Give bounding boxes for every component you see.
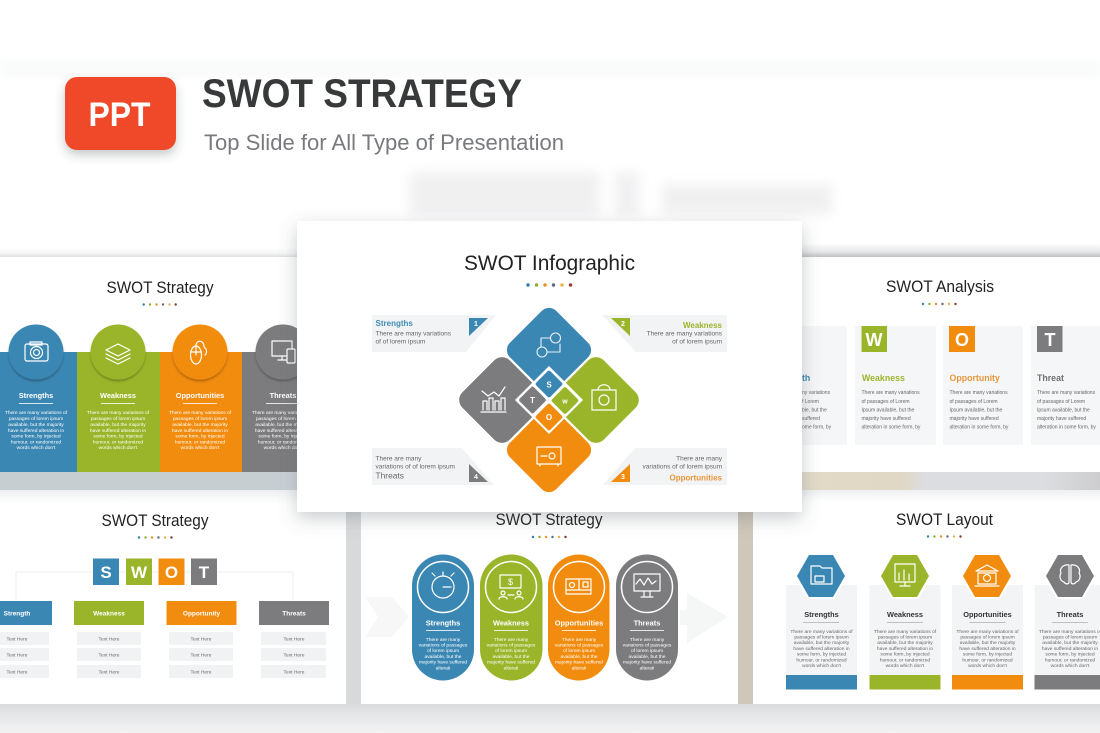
pill: weakness: of lorem ipsum [495, 648, 527, 654]
pill: strengths: available, but the [425, 654, 462, 660]
callout: strengths: There are many variations [376, 330, 452, 338]
column text: have suffered alteration in [8, 428, 64, 434]
column text: Strengths [19, 391, 53, 400]
letter squares [862, 326, 1062, 352]
diamond: threats [455, 353, 549, 447]
card text: alteration in some form, by [950, 424, 1009, 430]
card text: Threat [1037, 373, 1064, 383]
connector lines [16, 572, 293, 600]
header bars: Weakness [93, 610, 125, 618]
small diamond W [551, 386, 579, 415]
card text: some form, by injected [1045, 652, 1095, 658]
slide title: SWOT Analysis [886, 278, 994, 296]
pill: strengths: alterati [436, 666, 450, 672]
pill: threats: of lorem ipsum [631, 648, 663, 654]
card text: Opportunity [950, 373, 1000, 383]
small diamond S [535, 370, 563, 398]
card text: There are many variations [950, 390, 1008, 396]
small diamond W: w [561, 398, 568, 406]
column text: available, but the majority [8, 422, 64, 428]
card text [790, 610, 1100, 669]
slide: SWOT Infographic centre [297, 221, 802, 512]
column text: Threats [270, 391, 296, 400]
hexagon: opportunities [963, 555, 1011, 597]
card text: humour, or randomized [1045, 658, 1095, 664]
card text: Ipsum available, but the [1037, 408, 1090, 414]
dots [142, 303, 177, 306]
pill: opportunities: alterati [572, 666, 586, 672]
callout: strengths: 1 [474, 321, 478, 328]
column text [5, 391, 315, 451]
callout: threats: variations of of lorem ipsum [376, 464, 455, 470]
letter squares: W [866, 330, 882, 350]
card text: Ipsum available, but the [950, 408, 1003, 414]
row labels: Text Here [191, 636, 212, 642]
callout: weakness: Weakness [683, 321, 723, 330]
pill: threats: majority have suffered [623, 660, 671, 666]
column text: passages of lorem ipsum [256, 416, 310, 422]
pill: strengths: of lorem ipsum [427, 648, 459, 654]
diamond: opportunities [502, 403, 596, 497]
header bars: Threats [282, 610, 306, 618]
callout: opportunities: There are many [676, 456, 723, 462]
column text: Opportunities [176, 391, 224, 400]
column text: There are many variations of [252, 410, 315, 416]
callout: opportunities: 3 [621, 474, 625, 481]
header bars: Strength [4, 610, 30, 618]
card text: words which don't [1051, 663, 1090, 669]
card text: passages of lorem ipsum [794, 634, 849, 640]
arrow: left faint [365, 597, 409, 637]
diamond: weakness [549, 353, 643, 447]
pill: weakness: available, but the [493, 654, 530, 660]
letter squares [93, 558, 217, 585]
card text: passages of lorem ipsum [1043, 634, 1097, 640]
callout: threats: 4 [474, 474, 478, 481]
letter squares: O [955, 330, 969, 350]
card text: There are many variations of [874, 629, 937, 635]
row labels: Text Here [7, 636, 28, 642]
card text: th [802, 373, 810, 383]
card text: have suffered alteration in [1042, 646, 1098, 652]
card text: alteration in some form, by [1037, 424, 1096, 430]
card text: words which don't [886, 663, 925, 669]
small diamond O: O [546, 413, 552, 422]
circle: threats [256, 324, 310, 380]
card text: There are many variations of [956, 629, 1019, 635]
pill: weakness: alterati [504, 666, 518, 672]
callout: strengths [372, 315, 496, 352]
column text: There are many variations of [5, 410, 68, 416]
card text: f Lorem [802, 399, 819, 405]
card text: Threats [1057, 610, 1083, 619]
small diamond S: S [546, 380, 552, 390]
pill: threats: Threats [634, 618, 660, 628]
small diamond T: T [530, 396, 535, 405]
row labels: Text Here [99, 652, 120, 658]
column text: passages of lorem ipsum [91, 416, 145, 422]
row labels: Text Here [284, 636, 305, 642]
pill: strengths: There are many [426, 637, 461, 643]
row labels: Text Here [191, 670, 212, 676]
row labels: Text Here [99, 670, 120, 676]
dots [532, 536, 567, 538]
card text: of passages of Lorem [862, 399, 910, 405]
pill: threats: available, but the [629, 654, 666, 660]
slide: SWOT Strategy top left [0, 257, 315, 472]
subtitle: Top Slide for All Type of Presentation [204, 130, 564, 155]
pill: weakness: There are many [494, 637, 529, 643]
card text: available, but the majority [960, 640, 1016, 646]
cards [786, 585, 1100, 675]
slide title: SWOT Strategy [496, 511, 603, 529]
pill: weakness: Weakness [493, 618, 529, 628]
card text: passages of lorem ipsum [960, 634, 1015, 640]
callout: threats: There are many [376, 456, 422, 462]
letter squares: T [199, 563, 210, 582]
column text: have suffered alteration in [172, 428, 228, 434]
row labels [7, 636, 305, 676]
pill: threats: variations of passages [623, 642, 672, 648]
column text: words which don't [264, 445, 303, 451]
column text: humour, or randomized [11, 440, 61, 446]
card text: ome form, by [802, 424, 832, 430]
card text: Ipsum available, but the [862, 408, 915, 414]
column text: There are many variations of [87, 410, 150, 416]
pill: strengths [412, 554, 474, 680]
card text [802, 373, 1096, 430]
column text: have suffered alteration in [90, 428, 146, 434]
letter squares: O [165, 563, 178, 582]
row labels: Text Here [7, 652, 28, 658]
cards [802, 326, 1100, 445]
column text: humour, or randomized [175, 440, 225, 446]
pill: weakness: $ [508, 577, 513, 587]
column text: some form, by injected [11, 434, 61, 440]
callout: opportunities: variations of of lorem ipsum [643, 464, 722, 470]
letter squares: S [100, 563, 112, 582]
pill: threats [616, 554, 678, 680]
column text: words which don't [17, 445, 56, 451]
card text: words which don't [802, 663, 841, 669]
circle: strengths [8, 324, 64, 380]
circle: opportunities [172, 324, 228, 380]
slide: SWOT Strategy bottom left [0, 490, 346, 704]
card text: alteration in some form, by [862, 424, 921, 430]
pill: strengths: variations of passages [419, 642, 468, 648]
column text: some form, by injected [175, 434, 225, 440]
small diamond T [518, 386, 547, 414]
card text: ny variations [802, 390, 831, 396]
card text: available, but the majority [794, 640, 850, 646]
column text: passages of lorem ipsum [9, 416, 63, 422]
slide title: SWOT Layout [896, 511, 993, 529]
card text: Weakness [862, 373, 905, 383]
dots [138, 536, 173, 539]
callout: weakness: There are many variations [646, 330, 723, 338]
column text: humour, or randomized [93, 440, 143, 446]
card text: Weakness [887, 610, 923, 619]
slide title: SWOT Infographic [464, 251, 635, 275]
column text: Weakness [100, 391, 136, 400]
card text: have suffered alteration in [959, 646, 1016, 652]
column text: humour, or randomized [258, 440, 308, 446]
pill: opportunities: of lorem ipsum [563, 648, 595, 654]
column text: some form, by injected [258, 434, 308, 440]
card text: humour, or randomized [880, 658, 930, 664]
dots [927, 535, 962, 538]
column text: passages of lorem ipsum [173, 416, 227, 422]
callout: opportunities [603, 448, 727, 485]
pill: strengths: majority have suffered [419, 660, 467, 666]
bottom bars [786, 675, 1100, 690]
blurred ghost title [410, 172, 832, 216]
hexagon: strengths [797, 555, 845, 597]
letter squares: W [131, 563, 148, 582]
pill: weakness [480, 554, 542, 680]
pill: strengths: Strengths [426, 618, 460, 628]
callout: weakness: of of lorem ipsum [672, 338, 722, 346]
callout: strengths: Strengths [376, 319, 413, 328]
card text: have suffered alteration in [793, 646, 850, 652]
pill: threats: alterati [640, 666, 654, 672]
card text: humour, or randomized [796, 658, 847, 664]
small diamond O [535, 403, 563, 431]
pill: weakness: majority have suffered [487, 660, 535, 666]
diamond: strengths [502, 303, 596, 397]
row labels: Text Here [284, 652, 305, 658]
pill: opportunities: variations of passages [555, 642, 604, 648]
dots [526, 283, 572, 287]
column text: There are many variations of [169, 410, 232, 416]
pill: threats: There are many [630, 637, 665, 643]
column text: words which don't [99, 445, 138, 451]
column text: have suffered alteration in [255, 428, 311, 434]
main title: SWOT STRATEGY [202, 72, 522, 116]
header badge: PPT: PPT [88, 96, 151, 134]
header bars [0, 601, 329, 625]
circle: weakness [90, 324, 146, 380]
pill: opportunities: available, but the [561, 654, 598, 660]
column text: available, but the majority [90, 422, 146, 428]
card text: ble, but the [802, 408, 827, 414]
text rows [0, 632, 326, 678]
arrow: right faint [680, 593, 728, 643]
column text: available, but the majority [172, 422, 228, 428]
card text: words which don't [968, 663, 1007, 669]
card text: of passages of Lorem [950, 399, 998, 405]
card text: Strengths [804, 610, 839, 619]
card text: There are many variations of [1039, 629, 1100, 635]
card text: available, but the majority [877, 640, 933, 646]
slide title: SWOT Strategy [106, 279, 214, 297]
pill: opportunities [548, 554, 610, 680]
callout: threats [372, 448, 494, 485]
card text: passages of lorem ipsum [878, 634, 932, 640]
card text: There are many variations [1037, 390, 1096, 396]
pill: opportunities: Opportunities [555, 618, 603, 628]
card text: of passages of Lorem [1037, 399, 1085, 405]
slide: SWOT Layout [753, 490, 1100, 704]
hexagon: threats [1046, 555, 1094, 597]
slide: SWOT Strategy bottom centre [361, 500, 738, 703]
callout: threats: Threats [376, 470, 404, 480]
callout: opportunities: Opportunities [670, 474, 723, 482]
card text: some form, by injected [797, 652, 846, 658]
row labels: Text Here [284, 670, 305, 676]
column text: some form, by injected [93, 434, 143, 440]
slide title: SWOT Strategy [102, 512, 209, 530]
row labels: Text Here [99, 636, 120, 642]
callout: weakness [602, 315, 727, 352]
card text: humour, or randomized [962, 658, 1013, 664]
card text: some form, by injected [963, 652, 1012, 658]
header badge: PPT [65, 77, 176, 150]
card text: majority have suffered [862, 416, 911, 422]
pill: opportunities: There are many [562, 637, 597, 643]
pill: weakness: variations of passages [487, 642, 536, 648]
letter squares: T [1044, 330, 1056, 350]
card text: Opportunities [963, 610, 1012, 619]
column text: available, but the majority [255, 422, 311, 428]
pill: opportunities: majority have suffered [555, 660, 603, 666]
header bars: Opportunity [183, 610, 220, 618]
card text: majority have suffered [950, 416, 999, 422]
slide: SWOT Analysis [790, 257, 1100, 472]
card text: suffered [802, 416, 820, 422]
dots [922, 303, 957, 305]
callout: weakness: 2 [621, 321, 625, 328]
card text: some form, by injected [880, 652, 930, 658]
column text: words which don't [181, 445, 220, 451]
card text: majority have suffered [1037, 416, 1086, 422]
card text: There are many variations of [790, 629, 853, 635]
card text: There are many variations [862, 390, 920, 396]
centre white diamond [515, 366, 583, 434]
card text: available, but the majority [1042, 640, 1098, 646]
hexagon: weakness [881, 555, 929, 597]
callout: strengths: of of lorem ipsum [376, 338, 425, 346]
card text: have suffered alteration in [877, 646, 933, 652]
colour bands [0, 352, 302, 472]
row labels: Text Here [191, 652, 212, 658]
row labels: Text Here [7, 670, 28, 676]
